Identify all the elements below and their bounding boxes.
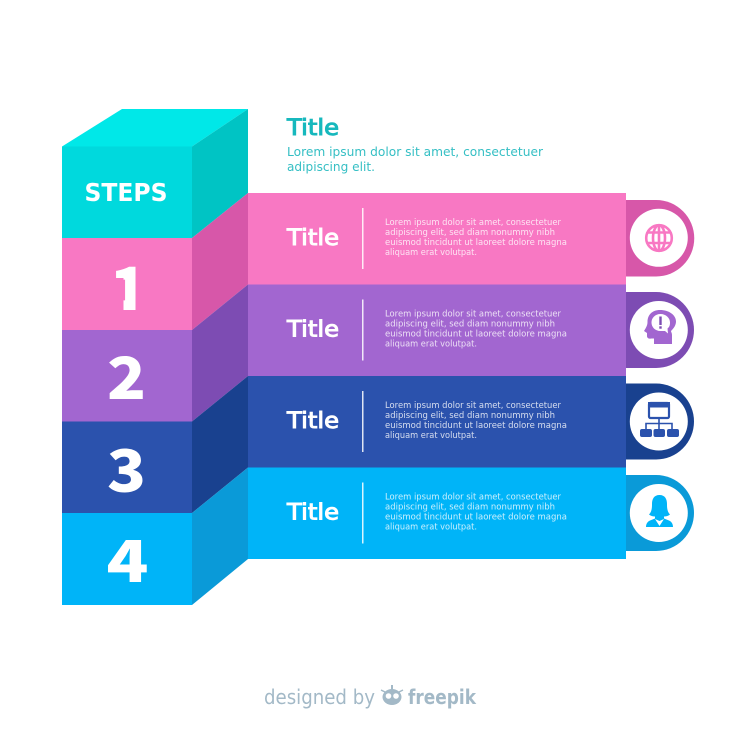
panel: step 3 bar <box>248 376 694 468</box>
heading description <box>287 144 544 174</box>
bar text: adipiscing elit, sed diam nonummy nibh <box>385 320 555 330</box>
bar text: Lorem ipsum dolor sit amet, consectetuer <box>385 310 561 320</box>
bar text: aliquam erat volutpat. <box>385 340 477 350</box>
icon: globe <box>646 225 672 251</box>
bar text: euismod tincidunt ut laoreet dolore magna <box>385 512 567 522</box>
bar text: adipiscing elit, sed diam nonummy nibh <box>385 411 555 421</box>
icon: network <box>640 402 679 437</box>
bar title: Title <box>286 226 339 251</box>
isometric steps column <box>62 109 248 605</box>
bar text: aliquam erat volutpat. <box>385 248 477 258</box>
tab with network icon <box>620 384 694 460</box>
bar text: adipiscing elit, sed diam nonummy nibh <box>385 502 555 512</box>
tab with globe icon <box>620 200 694 276</box>
number 4: 4 <box>106 515 148 599</box>
number 2: 2 <box>107 332 146 416</box>
step 4 block <box>62 468 248 605</box>
bar text: euismod tincidunt ut laoreet dolore magna <box>385 421 567 431</box>
heading block <box>286 116 544 174</box>
bar text <box>385 401 567 441</box>
tab with head icon <box>620 292 694 368</box>
bar title: Title <box>286 318 339 342</box>
bar text: aliquam erat volutpat. <box>385 431 477 441</box>
bar text <box>385 492 567 532</box>
bar text: Lorem ipsum dolor sit amet, consectetuer <box>385 492 561 502</box>
bar text: adipiscing elit, sed diam nonummy nibh <box>385 228 555 238</box>
number 1: 1 <box>111 243 151 327</box>
tab with person icon <box>620 475 694 551</box>
heading description: adipiscing elit. <box>287 159 375 174</box>
bar text <box>385 218 567 258</box>
bar text <box>385 310 567 350</box>
bar text: euismod tincidunt ut laoreet dolore magna <box>385 330 567 340</box>
bar text: euismod tincidunt ut laoreet dolore magna <box>385 238 567 248</box>
bar text: aliquam erat volutpat. <box>385 522 477 532</box>
freepik credit <box>264 685 477 709</box>
freepik credit: freepik <box>408 685 477 709</box>
panel: step 2 bar <box>248 284 694 376</box>
step 3 block <box>62 376 248 513</box>
icon: businesswoman <box>646 495 673 527</box>
bar text: Lorem ipsum dolor sit amet, consectetuer <box>385 401 561 411</box>
panel: step 1 bar <box>248 193 694 284</box>
steps block <box>62 109 248 238</box>
step 2 block <box>62 284 248 422</box>
heading title: Title <box>286 116 339 141</box>
steps label: STEPS <box>84 178 168 207</box>
freepik credit: designed by <box>264 685 375 709</box>
bar title: Title <box>286 409 339 434</box>
step 1 block <box>62 193 248 330</box>
bar text: Lorem ipsum dolor sit amet, consectetuer <box>385 218 561 228</box>
number 3: 3 <box>107 424 146 508</box>
panel: step 4 bar <box>248 468 694 559</box>
top face <box>62 109 248 146</box>
icon: head with exclamation mark <box>644 310 676 344</box>
heading description: Lorem ipsum dolor sit amet, consectetuer <box>287 144 544 159</box>
icon: freepik mascot <box>381 685 403 705</box>
infographic <box>62 109 694 708</box>
bar title: Title <box>286 500 339 526</box>
